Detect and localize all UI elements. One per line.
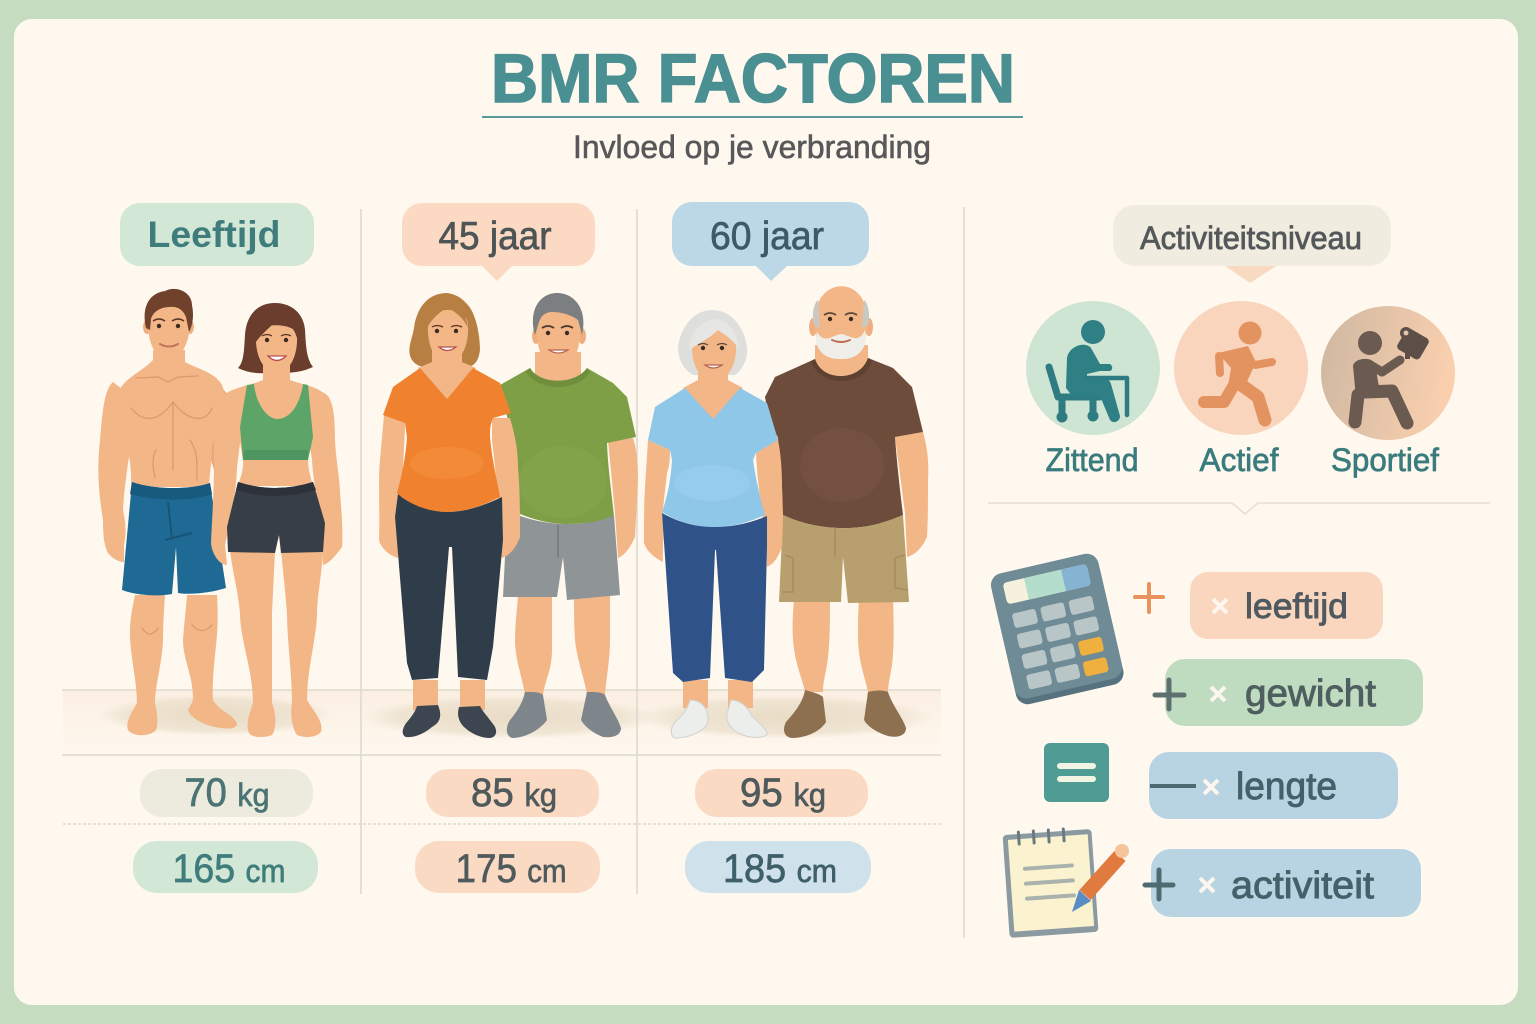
icon: Actief [1174, 301, 1308, 435]
figure: young man [98, 289, 237, 735]
formula: activiteit: activiteit [1231, 865, 1374, 907]
formula: lengte [1149, 752, 1398, 819]
figure: man 45 [500, 293, 638, 738]
badge: 45 jaar [402, 203, 595, 281]
label: Actief: Actief [1200, 442, 1279, 478]
formula: lengte: lengte [1236, 766, 1337, 808]
stat pill: 95 kg: 95 kg [740, 771, 826, 815]
stat pill: 85 kg [426, 769, 599, 817]
icon: notepad and pencil [1002, 827, 1129, 938]
badge: 60 jaar: 60 jaar [710, 215, 824, 258]
label: Zittend: Zittend [1046, 442, 1138, 478]
badge: Leeftijd: Leeftijd [148, 214, 280, 255]
icon: equals [1044, 743, 1109, 802]
badge: Activiteitsniveau: Activiteitsniveau [1140, 220, 1362, 256]
stat pill: 165 cm: 165 cm [172, 847, 286, 891]
stat pill: 175 cm [415, 841, 600, 893]
figure: man 60 [765, 286, 928, 738]
stat pill: 185 cm: 185 cm [723, 847, 837, 891]
badge: Activiteitsniveau [1113, 205, 1391, 283]
formula: activiteit [1145, 849, 1421, 917]
figure: young woman [211, 303, 342, 737]
stat pill: 85 kg: 85 kg [471, 771, 557, 815]
stat pill: 95 kg [695, 769, 868, 817]
label: Sportief: Sportief [1331, 442, 1439, 478]
floor band [63, 691, 941, 754]
subtitle: Invloed op je verbranding [573, 129, 931, 165]
icon: Sportief [1321, 306, 1455, 440]
formula: gewicht: gewicht [1245, 673, 1376, 715]
stat pill: 165 cm [133, 841, 318, 893]
stat pill: 70 kg [140, 769, 313, 817]
formula: gewicht [1155, 659, 1423, 726]
stat pill: 70 kg: 70 kg [184, 771, 270, 815]
icon: Zittend [1026, 301, 1160, 435]
formula: leeftijd [1190, 572, 1383, 639]
stat pill: 185 cm [685, 841, 871, 893]
title: BMR FACTOREN [491, 40, 1015, 117]
badge: 45 jaar: 45 jaar [438, 215, 552, 258]
badge: Leeftijd [120, 203, 314, 266]
figure: woman 60 [644, 310, 783, 738]
stat pill: 175 cm: 175 cm [456, 847, 566, 891]
figure: woman 45 [379, 293, 520, 738]
formula: leeftijd: leeftijd [1245, 587, 1348, 626]
symbol: plus orange [1135, 584, 1163, 612]
badge: 60 jaar [672, 202, 869, 281]
icon: calculator [989, 551, 1126, 707]
